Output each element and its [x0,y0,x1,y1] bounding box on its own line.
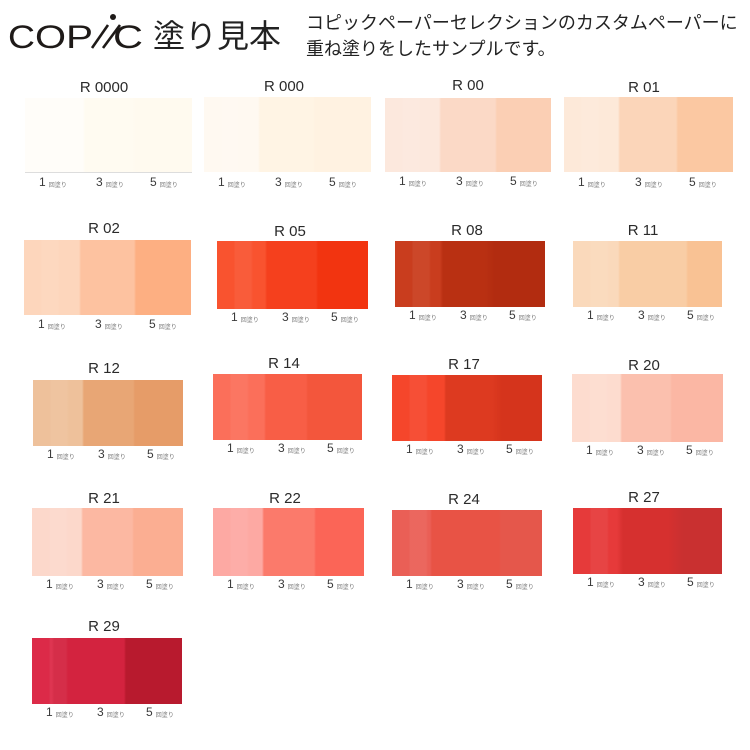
description text [306,13,738,59]
swatch: R 02: 1 回塗り [38,317,66,331]
swatch: R 11: 5 回塗り [687,308,715,322]
swatch: R 12: R 12 [88,360,120,377]
swatch: R 27: R 27 [628,489,660,506]
swatch: R 02: R 02 [88,220,120,237]
swatch: R 27 [573,489,722,589]
swatch: R 12 [33,360,183,461]
swatch: R 0000 [25,79,192,189]
swatch: R 0000: R 0000 [80,79,128,96]
swatch: R 01: 3 回塗り [635,175,663,189]
swatch: R 20: 3 回塗り [637,443,665,457]
swatch: R 21: 1 回塗り [46,577,74,591]
swatch: R 14: 5 回塗り [327,441,355,455]
swatch: R 21: R 21 [88,490,120,507]
swatch: R 21: 3 回塗り [97,577,125,591]
swatch: R 29: 3 回塗り [97,705,125,719]
swatch: R 17: R 17 [448,356,480,373]
swatch: R 02: 5 回塗り [149,317,177,331]
swatch: R 05: 3 回塗り [282,310,310,324]
COPIC logo: O [35,19,66,55]
swatch: R 05: R 05 [274,223,306,240]
swatch: R 27: 5 回塗り [687,575,715,589]
swatch: R 24: 5 回塗り [506,577,534,591]
swatch: R 01: 5 回塗り [689,175,717,189]
swatch: R 05: 1 回塗り [231,310,259,324]
swatch: R 00: 3 回塗り [456,174,484,188]
swatch: R 29: 1 回塗り [46,705,74,719]
swatch: R 20: 1 回塗り [586,443,614,457]
swatch: R 29: 5 回塗り [146,705,174,719]
swatch: R 11: 1 回塗り [587,308,615,322]
swatch: R 11: 3 回塗り [638,308,666,322]
COPIC logo: C [8,19,35,55]
swatch: R 00: 1 回塗り [399,174,427,188]
swatch: R 17: 5 回塗り [506,442,534,456]
swatch: R 02 [24,220,191,331]
swatch: R 08: 5 回塗り [509,308,537,322]
swatch: R 22 [213,490,364,591]
swatch: R 17: 1 回塗り [406,442,434,456]
swatch: R 00 [385,77,551,188]
swatch: R 01: R 01 [628,79,660,96]
swatch: R 08 [395,222,545,322]
swatch: R 29 [32,618,182,719]
swatch: R 22: 5 回塗り [327,577,355,591]
COPIC logo [8,14,143,55]
swatch: R 24: 3 回塗り [457,577,485,591]
swatch: R 01: 1 回塗り [578,175,606,189]
COPIC logo: C [113,19,143,55]
swatch: R 14: 3 回塗り [278,441,306,455]
swatch: R 12: 3 回塗り [98,447,126,461]
swatch: R 20: 5 回塗り [686,443,714,457]
swatch: R 24 [392,491,542,591]
swatch: R 00: R 00 [452,77,484,94]
swatch: R 000: 3 回塗り [275,175,303,189]
swatch: R 000: R 000 [264,78,304,95]
swatch: R 21: 5 回塗り [146,577,174,591]
swatch: R 22: 3 回塗り [278,577,306,591]
swatch: R 11 [573,222,722,322]
swatch: R 000: 1 回塗り [218,175,246,189]
swatch: R 0000: 5 回塗り [150,175,178,189]
COPIC logo: P [66,19,93,55]
swatch: R 22: R 22 [269,490,301,507]
heading: 塗り見本: 塗り見本 [153,18,281,54]
swatch: R 05 [217,223,368,324]
description text: 重ね塗りをしたサンプルです。 [306,39,556,59]
swatch: R 14: R 14 [268,355,300,372]
swatch: R 0000: 1 回塗り [39,175,67,189]
swatch: R 08: 1 回塗り [409,308,437,322]
swatch: R 24: 1 回塗り [406,577,434,591]
swatch: R 08: 3 回塗り [460,308,488,322]
swatch: R 20 [572,357,723,457]
swatch: R 14: 1 回塗り [227,441,255,455]
swatch: R 0000: 3 回塗り [96,175,124,189]
swatch: R 17: 3 回塗り [457,442,485,456]
swatch: R 24: R 24 [448,491,480,508]
swatch: R 11: R 11 [628,222,658,239]
swatch: R 17 [392,356,542,456]
swatch: R 27: 3 回塗り [638,575,666,589]
swatch: R 21 [32,490,183,591]
swatch: R 000 [204,78,371,189]
swatch: R 01 [564,79,733,189]
swatch: R 22: 1 回塗り [227,577,255,591]
swatch: R 20: R 20 [628,357,660,374]
swatch: R 000: 5 回塗り [329,175,357,189]
swatch: R 12: 1 回塗り [47,447,75,461]
swatch: R 14 [213,355,362,455]
swatch: R 00: 5 回塗り [510,174,538,188]
swatch: R 02: 3 回塗り [95,317,123,331]
swatch: R 29: R 29 [88,618,120,635]
description text: コピックペーパーセレクションのカスタムペーパーに [306,13,738,33]
swatch: R 12: 5 回塗り [147,447,175,461]
swatch: R 05: 5 回塗り [331,310,359,324]
swatch: R 27: 1 回塗り [587,575,615,589]
swatch: R 08: R 08 [451,222,483,239]
